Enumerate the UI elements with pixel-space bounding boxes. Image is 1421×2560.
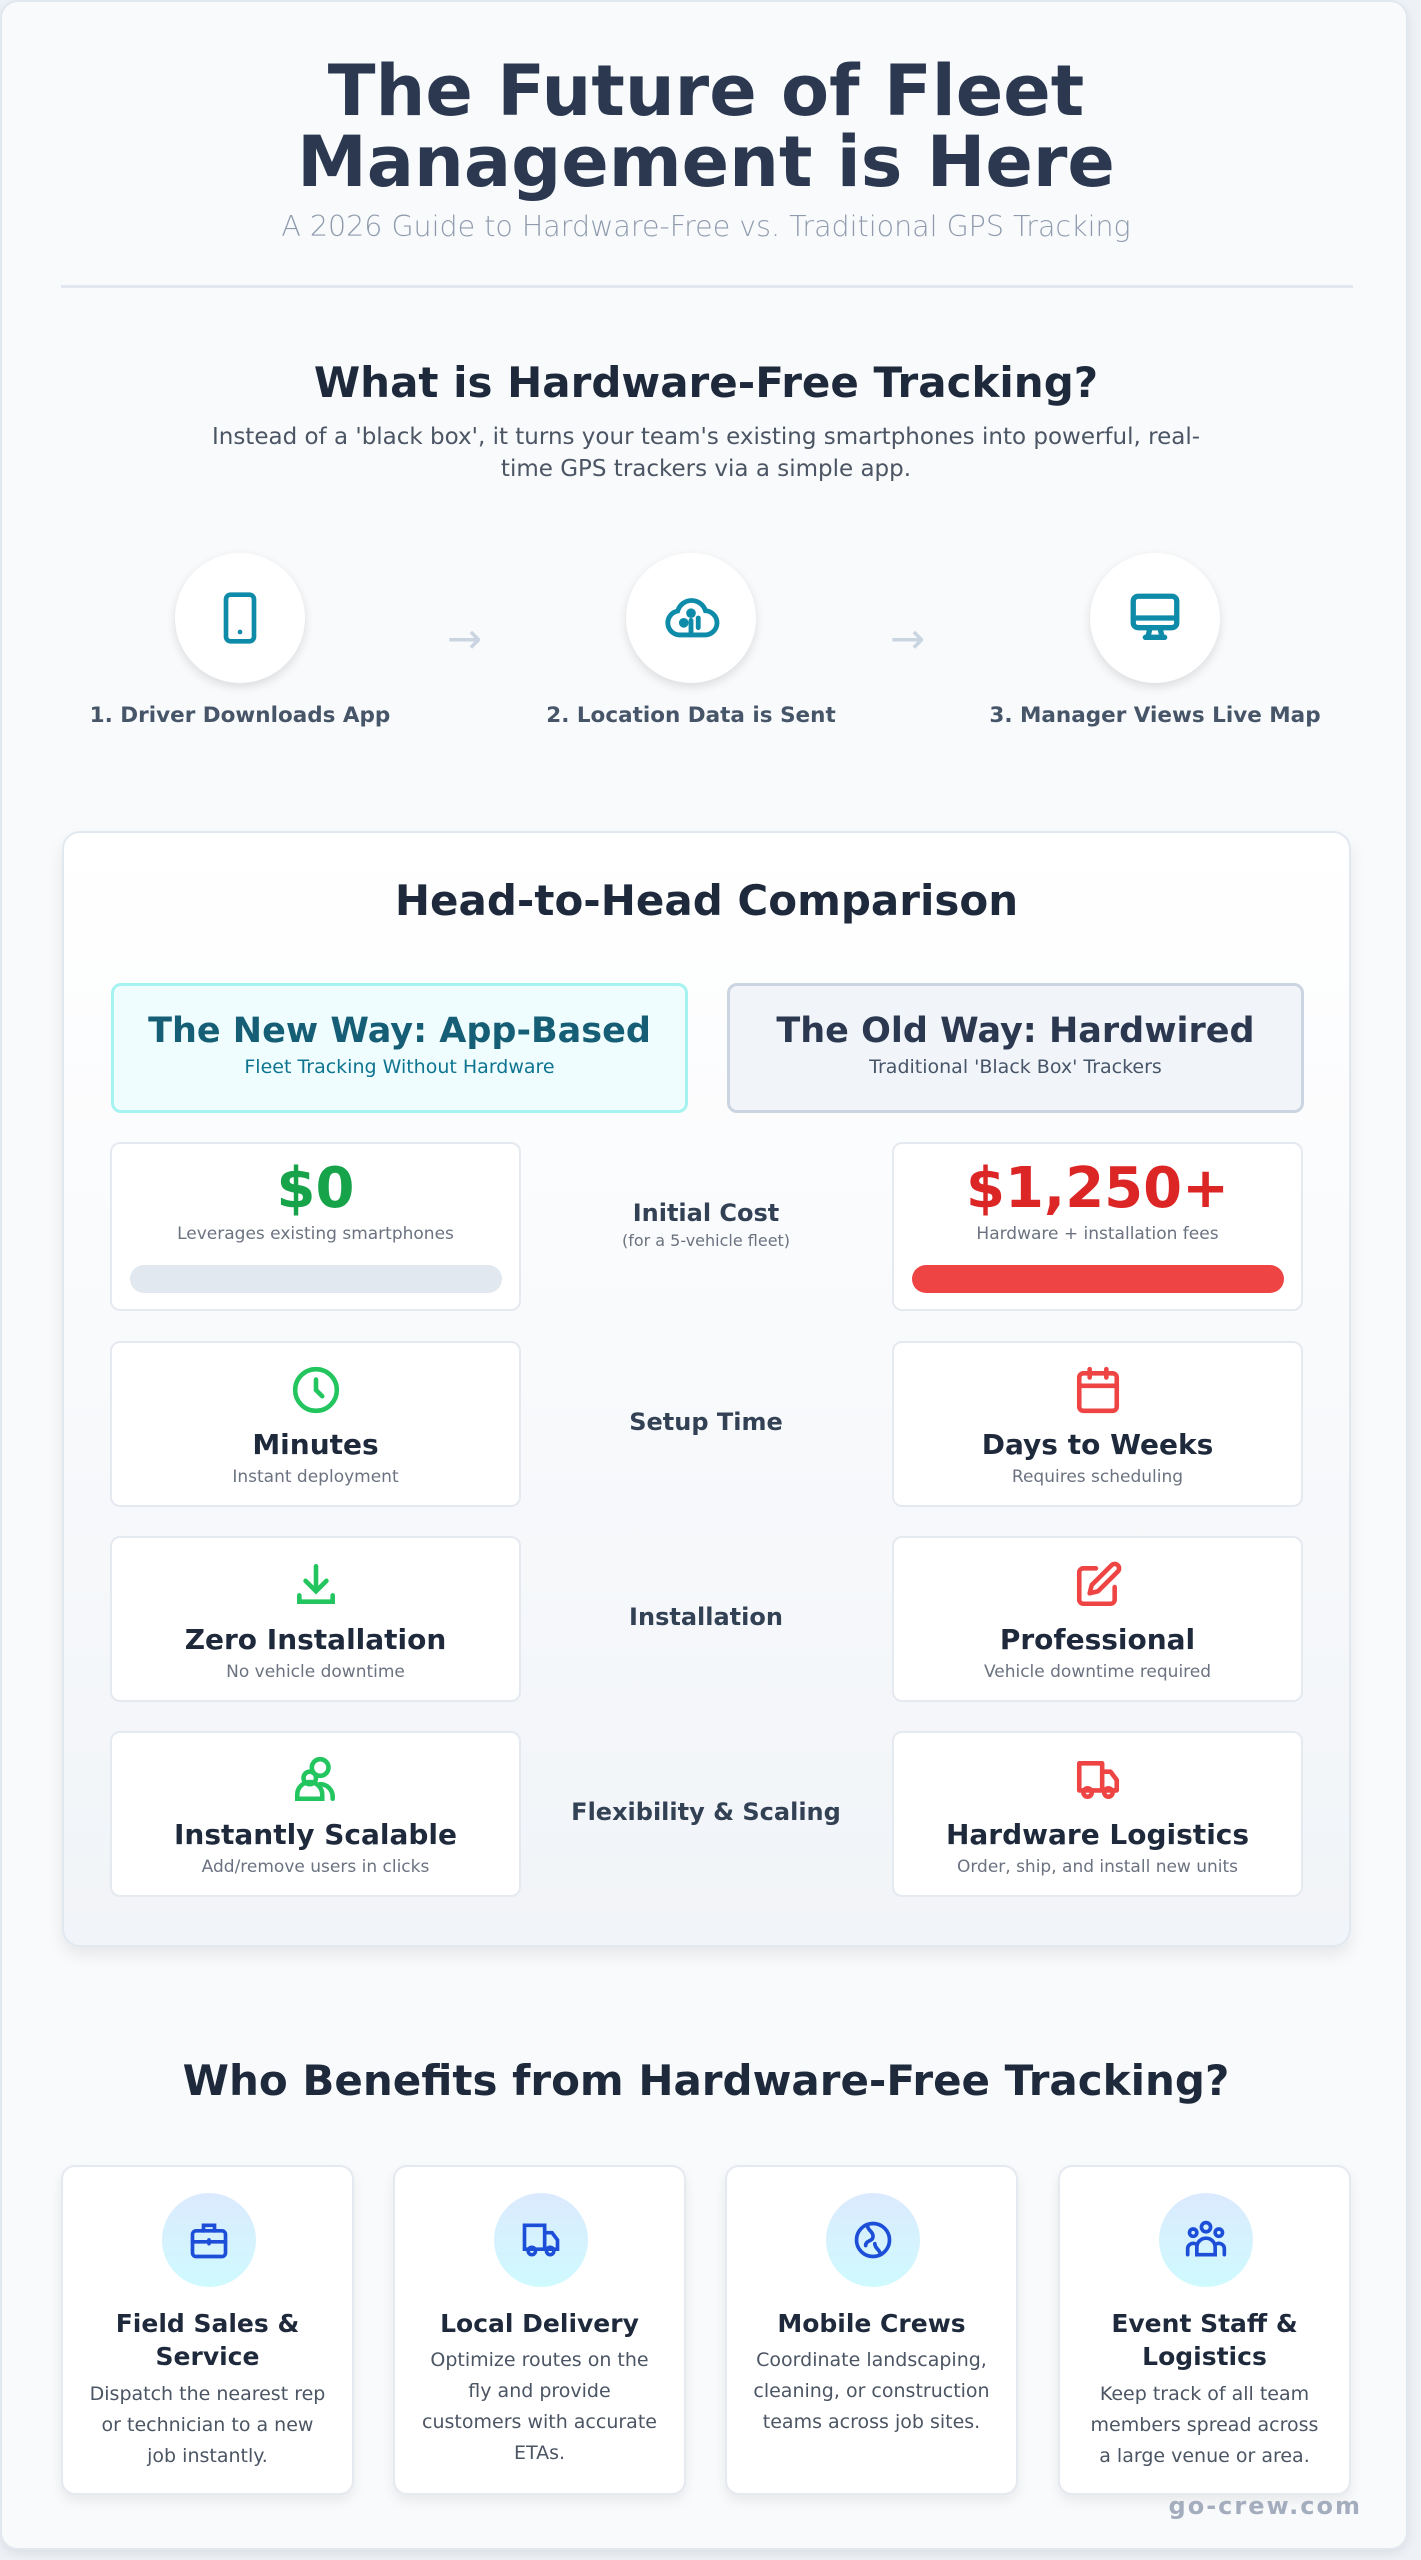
footer: brand: go-crew.com [1169, 2492, 1362, 2520]
header: old way: Traditional 'Black Box' Trackers [869, 1056, 1162, 1078]
row: setup time [110, 1341, 1303, 1507]
panel: comparison [62, 831, 1351, 1947]
intro text: Instead of a 'black box', it turns your team's existing smartphones into powerful, real-time GPS trackers via a simple app. [212, 424, 1200, 482]
card: professional: Professional [1000, 1623, 1195, 1656]
heading: who benefits: Who Benefits from Hardware-Free Tracking? [183, 2056, 1229, 2105]
card: professional [892, 1536, 1303, 1702]
card: $1,250+ [892, 1142, 1303, 1311]
card: $0: $0 [277, 1156, 354, 1221]
benefit: local delivery: Optimize routes on the [430, 2349, 649, 2371]
label: flexibility: Flexibility & Scaling [571, 1798, 841, 1826]
card: instantly scalable: Add/remove users in clicks [202, 1857, 429, 1877]
card: days to weeks: Days to Weeks [982, 1428, 1213, 1461]
label: initial cost: Initial Cost [633, 1199, 779, 1227]
benefit: local delivery [393, 2165, 686, 2495]
row: initial cost [110, 1142, 1303, 1311]
step 1 [90, 583, 390, 728]
card: professional: Vehicle downtime required [984, 1662, 1211, 1682]
card: instantly scalable: Instantly Scalable [174, 1818, 457, 1851]
icon: users [294, 1756, 335, 1801]
card: minutes [110, 1341, 521, 1507]
card: minutes: Minutes [252, 1428, 379, 1461]
row: flexibility [110, 1731, 1303, 1897]
card: $0 [110, 1142, 521, 1311]
icon: edit [1076, 1562, 1122, 1606]
card: instantly scalable [110, 1731, 521, 1897]
benefit: event staff [1058, 2165, 1351, 2495]
label: initial cost [622, 1199, 790, 1250]
title: Management is Here [297, 121, 1115, 203]
title [297, 50, 1115, 203]
heading: what is: What is Hardware-Free Tracking? [314, 358, 1098, 407]
heading: comparison: Head-to-Head Comparison [395, 876, 1018, 925]
subtitle: A 2026 Guide to Hardware-Free vs. Traditional GPS Tracking [281, 210, 1131, 243]
icon: calendar [1076, 1366, 1120, 1414]
label: setup time: Setup Time [629, 1408, 783, 1436]
icon: monitor [1090, 553, 1220, 683]
icon: truck [494, 2193, 588, 2287]
card: days to weeks [892, 1341, 1303, 1507]
header: old way: The Old Way: Hardwired [776, 1011, 1255, 1051]
benefit: mobile crews: Coordinate landscaping, cleaning, or construction teams across job sites. [753, 2349, 990, 2433]
icon: clock [292, 1366, 340, 1414]
benefit: event staff: Keep track of all team members spread across a large venue or area. [1091, 2383, 1318, 2467]
header: new way [111, 983, 688, 1113]
benefit: mobile crews: Mobile Crews [777, 2309, 966, 2338]
header: new way: Fleet Tracking Without Hardware [244, 1056, 555, 1078]
row: installation [110, 1536, 1303, 1702]
step 1: 1. Driver Downloads App [90, 703, 390, 728]
icon: truck [1076, 1761, 1120, 1799]
card: $1,250+: $1,250+ [966, 1156, 1229, 1221]
icon: cloud [626, 553, 756, 683]
icon: phone [175, 553, 305, 683]
card: zero installation [110, 1536, 521, 1702]
card: days to weeks: Requires scheduling [1012, 1467, 1183, 1487]
card: hardware logistics: Order, ship, and install new units [957, 1857, 1238, 1877]
step 2: 2. Location Data is Sent [546, 703, 836, 728]
label: installation: Installation [629, 1603, 783, 1631]
title: The Future of Fleet [328, 50, 1084, 132]
icon: group [1159, 2193, 1253, 2287]
card: hardware logistics [892, 1731, 1303, 1897]
step 3 [989, 583, 1321, 728]
card: hardware logistics: Hardware Logistics [946, 1818, 1249, 1851]
card: minutes: Instant deployment [232, 1467, 399, 1487]
arrow: → [447, 614, 482, 663]
benefit: mobile crews [725, 2165, 1018, 2495]
card: $0: Leverages existing smartphones [177, 1224, 454, 1244]
card: zero installation: Zero Installation [185, 1623, 446, 1656]
arrow: → [890, 614, 925, 663]
benefit: field sales: Field Sales & Service [116, 2309, 299, 2371]
benefit: event staff: Event Staff & Logistics [1111, 2309, 1298, 2371]
benefit: field sales: Dispatch the nearest rep or technician to a new job instantly. [90, 2383, 325, 2467]
step 3: 3. Manager Views Live Map [989, 703, 1321, 728]
benefit: field sales [61, 2165, 354, 2495]
label: initial cost: (for a 5-vehicle fleet) [622, 1231, 790, 1250]
step 2 [546, 583, 836, 728]
icon: download [297, 1564, 335, 1604]
header: old way [727, 983, 1304, 1113]
icon: briefcase [162, 2193, 256, 2287]
card: $1,250+: Hardware + installation fees [976, 1224, 1219, 1244]
header: new way: The New Way: App-Based [148, 1011, 651, 1051]
benefit: local delivery: Local Delivery [440, 2309, 639, 2338]
card: zero installation: No vehicle downtime [226, 1662, 405, 1682]
benefit: local delivery: fly and provide customers with accurate ETAs. [422, 2380, 657, 2464]
icon: globe [826, 2193, 920, 2287]
